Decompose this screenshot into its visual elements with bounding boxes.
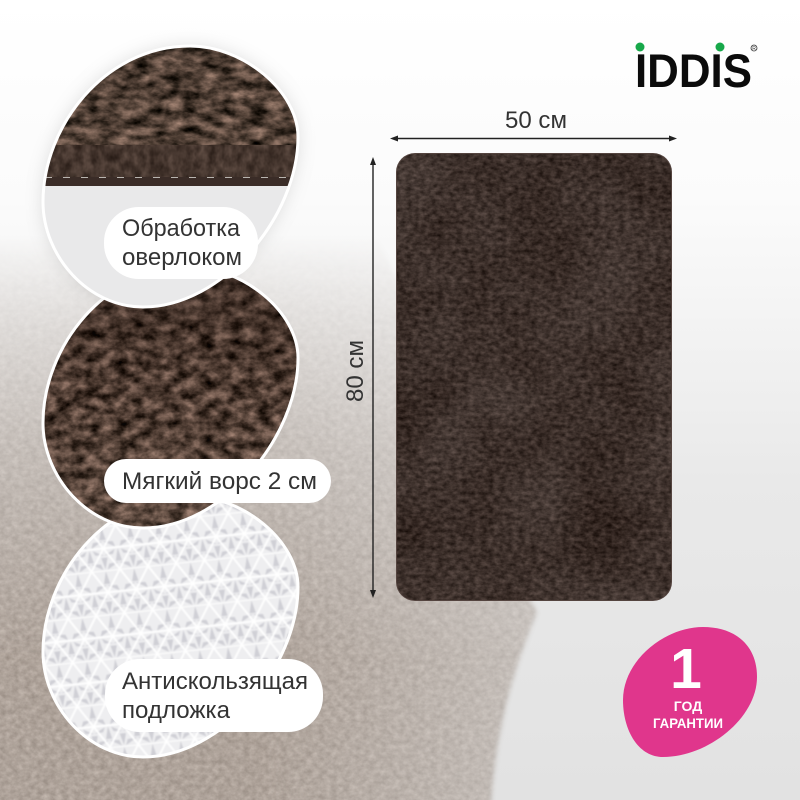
badge: 1 year warranty (623, 627, 757, 757)
label: soft pile (104, 459, 331, 503)
label: antislip: Антискользящая (122, 668, 308, 695)
label: soft pile: Мягкий ворс 2 см (122, 468, 317, 495)
label: overlock (104, 207, 258, 279)
badge: 1 year warranty: ГАРАНТИИ (653, 715, 723, 731)
dimension: width arrow and label (390, 107, 677, 142)
dimension: height arrow and label (342, 157, 376, 598)
badge: 1 year warranty: 1 (670, 637, 702, 701)
dimension: height arrow and label: 80 см (342, 340, 369, 402)
circle: soft pile (40, 260, 305, 532)
background: fluffy rug (0, 259, 538, 800)
logo: IDDIS: R (752, 46, 756, 52)
badge: 1 year warranty: ГОД (674, 698, 702, 714)
label: overlock: Обработка (122, 215, 241, 242)
label: overlock: оверлоком (122, 244, 242, 271)
product: brown bath mat (396, 153, 672, 601)
label: antislip: подложка (122, 697, 231, 724)
circle: overlock edge (40, 40, 305, 307)
dimension: width arrow and label: 50 см (505, 107, 567, 134)
logo: IDDIS: IDDIS (635, 44, 752, 97)
circle: antislip backing (40, 490, 305, 762)
label: antislip (105, 659, 323, 732)
